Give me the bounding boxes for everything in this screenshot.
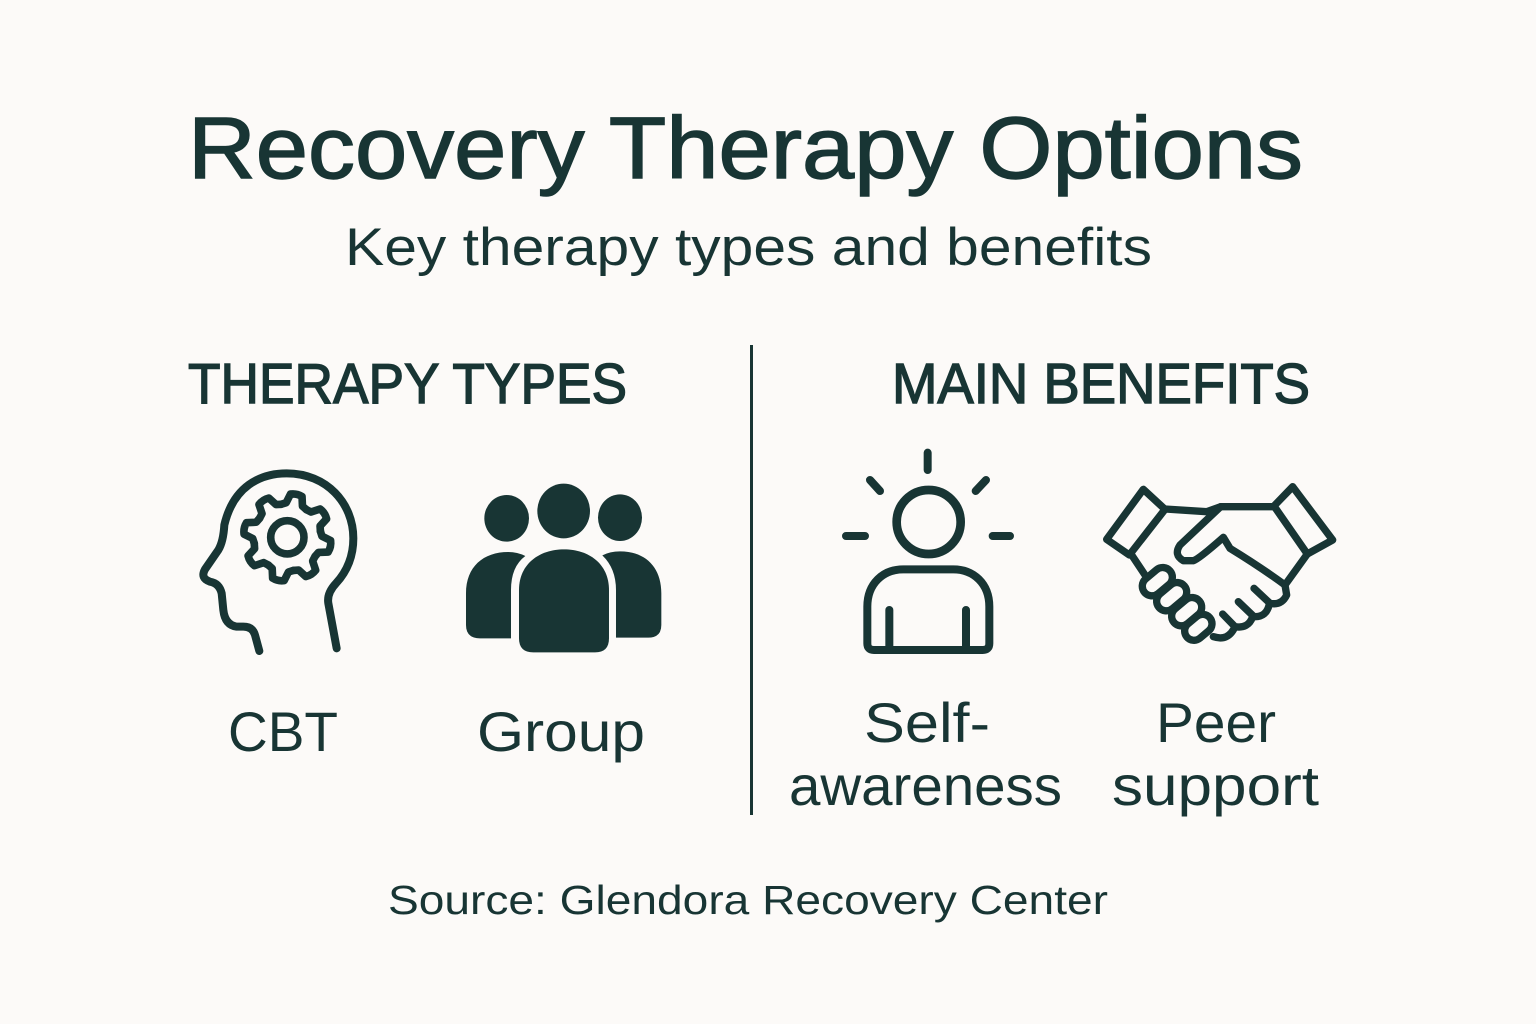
label: Self-awareness: awareness <box>789 754 1062 817</box>
label: Peer support: support <box>1112 754 1319 817</box>
icon: group of people <box>466 484 661 652</box>
label: Self-awareness: Self- <box>864 691 990 754</box>
label: Self-awareness <box>789 691 1062 817</box>
label: Peer support: Peer <box>1156 691 1276 754</box>
icon: handshake <box>1107 487 1333 644</box>
icon: self-awareness person <box>846 453 1010 650</box>
heading: main benefits: MAIN BENEFITS <box>892 352 1310 416</box>
subtitle: Key therapy types and benefits <box>345 218 1152 277</box>
title: Recovery Therapy Options <box>188 100 1303 197</box>
label: CBT: CBT <box>228 700 338 763</box>
label: Peer support <box>1112 691 1319 817</box>
heading: therapy types: THERAPY TYPES <box>188 352 627 416</box>
icon: head with gear <box>203 473 353 651</box>
source line: Source: Glendora Recovery Center <box>388 877 1108 923</box>
label: Group: Group <box>477 700 645 763</box>
